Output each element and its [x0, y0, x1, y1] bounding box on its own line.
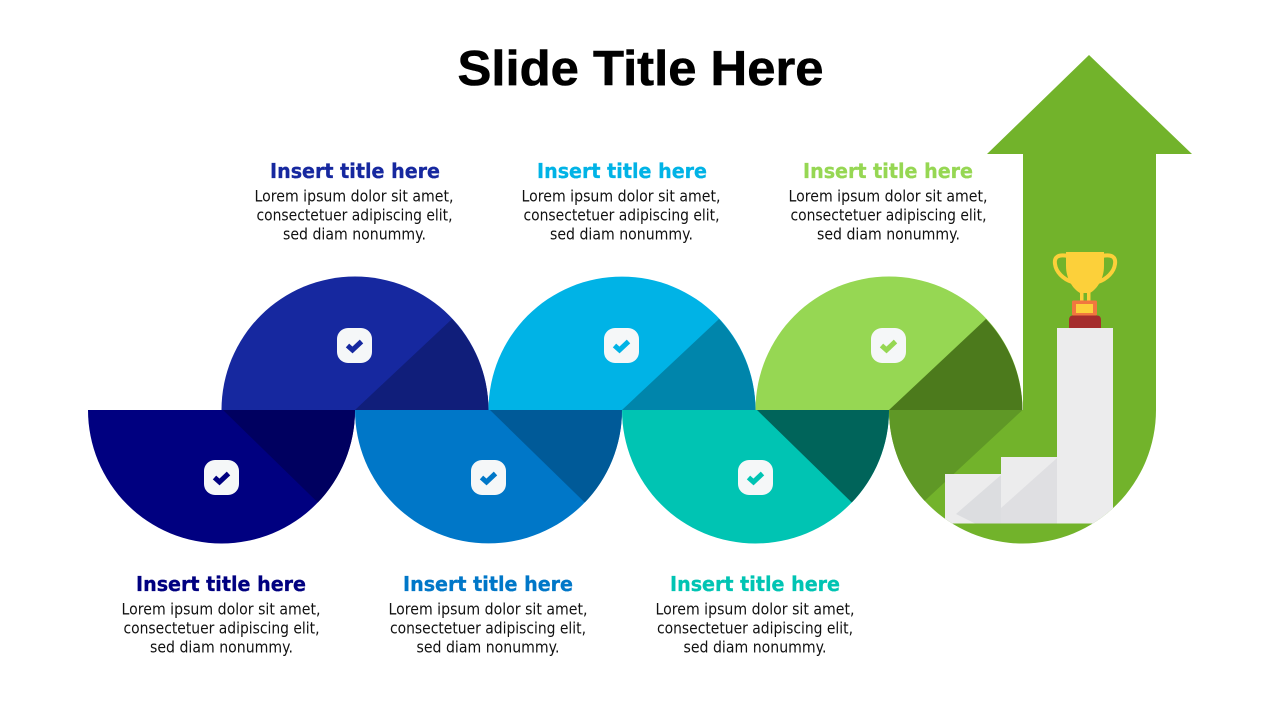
text block: step 4: Insert title here	[537, 159, 707, 183]
text block: step 4: consectetuer adipiscing elit,	[524, 206, 720, 224]
text block: step 3: sed diam nonummy.	[416, 638, 560, 656]
text block: step 6: Lorem ipsum dolor sit amet,	[788, 186, 988, 206]
text block: step 4: sed diam nonummy.	[550, 224, 693, 244]
panel: step 1 semicircle	[88, 410, 355, 544]
icon: check badge 1	[204, 460, 239, 495]
text block: step 4: Lorem ipsum dolor sit amet,	[522, 186, 720, 206]
text block: step 3	[388, 572, 588, 656]
icon: check badge 6	[871, 328, 906, 363]
text block: step 5: Insert title here	[670, 572, 840, 596]
text block: step 3: Lorem ipsum dolor sit amet,	[388, 600, 588, 618]
panel: step 4 semicircle	[488, 277, 756, 410]
title: Slide Title Here	[458, 41, 824, 96]
podium steps	[945, 328, 1113, 524]
icon: check badge 4	[604, 328, 639, 363]
text block: step 5	[656, 572, 854, 656]
text block: step 6: consectetuer adipiscing elit,	[790, 206, 986, 224]
text block: step 3: Insert title here	[403, 572, 573, 596]
text block: step 6: Insert title here	[803, 159, 973, 183]
text block: step 2	[254, 159, 454, 244]
text block: step 1	[122, 572, 320, 656]
text block: step 6: sed diam nonummy.	[817, 224, 960, 244]
text block: step 6	[788, 159, 988, 244]
icon: trophy	[1055, 252, 1115, 328]
text block: step 2: consectetuer adipiscing elit,	[256, 206, 452, 224]
panel: arrow base dark wedge	[889, 410, 1022, 501]
icon: check badge 3	[471, 460, 506, 495]
panel: step 3 semicircle	[355, 410, 622, 543]
text block: step 1: Insert title here	[136, 572, 306, 596]
text block: step 2: Lorem ipsum dolor sit amet,	[254, 186, 454, 206]
text block: step 5: consectetuer adipiscing elit,	[657, 618, 853, 638]
text block: step 3: consectetuer adipiscing elit,	[390, 618, 586, 638]
icon: check badge 5	[738, 460, 773, 495]
icon: check badge 2	[337, 328, 372, 363]
panel: step 5 semicircle	[622, 410, 889, 544]
text block: step 2: sed diam nonummy.	[283, 224, 426, 244]
text block: step 2: Insert title here	[270, 159, 440, 183]
text block: step 5: Lorem ipsum dolor sit amet,	[656, 600, 854, 618]
text block: step 1: consectetuer adipiscing elit,	[124, 618, 320, 638]
panel: step 6 semicircle	[756, 276, 1022, 410]
text block: step 4	[522, 159, 720, 244]
panel: step 2 semicircle	[222, 276, 488, 410]
text block: step 1: Lorem ipsum dolor sit amet,	[122, 600, 320, 618]
text block: step 1: sed diam nonummy.	[150, 638, 293, 656]
arrow: green growth arrow	[889, 55, 1192, 544]
text block: step 5: sed diam nonummy.	[684, 638, 826, 656]
